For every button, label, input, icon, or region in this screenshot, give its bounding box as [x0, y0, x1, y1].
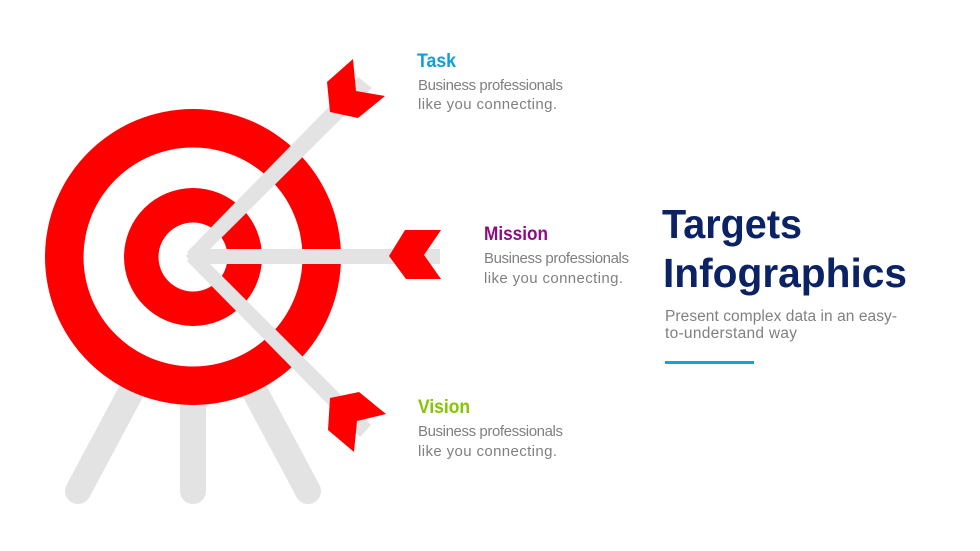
text block: task — [417, 51, 563, 113]
title: Targets — [662, 201, 802, 247]
text block: mission — [484, 224, 629, 287]
text block: task: like you connecting. — [418, 96, 557, 113]
text block: task: Business professionals — [418, 77, 563, 94]
text block: vision — [418, 397, 563, 460]
text block: vision: like you connecting. — [418, 443, 557, 460]
text block: mission: Mission — [484, 224, 548, 245]
title — [662, 201, 907, 296]
arrow: task — [187, 59, 385, 262]
title: Infographics — [663, 250, 907, 296]
accent line — [665, 361, 754, 364]
subtitle — [665, 308, 897, 342]
arrow: vision — [187, 251, 386, 452]
arrow: mission — [186, 230, 441, 279]
subtitle: Present complex data in an easy- — [665, 308, 897, 325]
target rings — [45, 109, 341, 405]
text block: vision: Business professionals — [418, 423, 563, 440]
target stand legs — [78, 375, 308, 491]
text block: vision: Vision — [418, 397, 470, 418]
text block: task: Task — [417, 51, 456, 72]
text block: mission: Business professionals — [484, 250, 629, 267]
subtitle: to-understand way — [665, 325, 797, 342]
text block: mission: like you connecting. — [484, 270, 623, 287]
